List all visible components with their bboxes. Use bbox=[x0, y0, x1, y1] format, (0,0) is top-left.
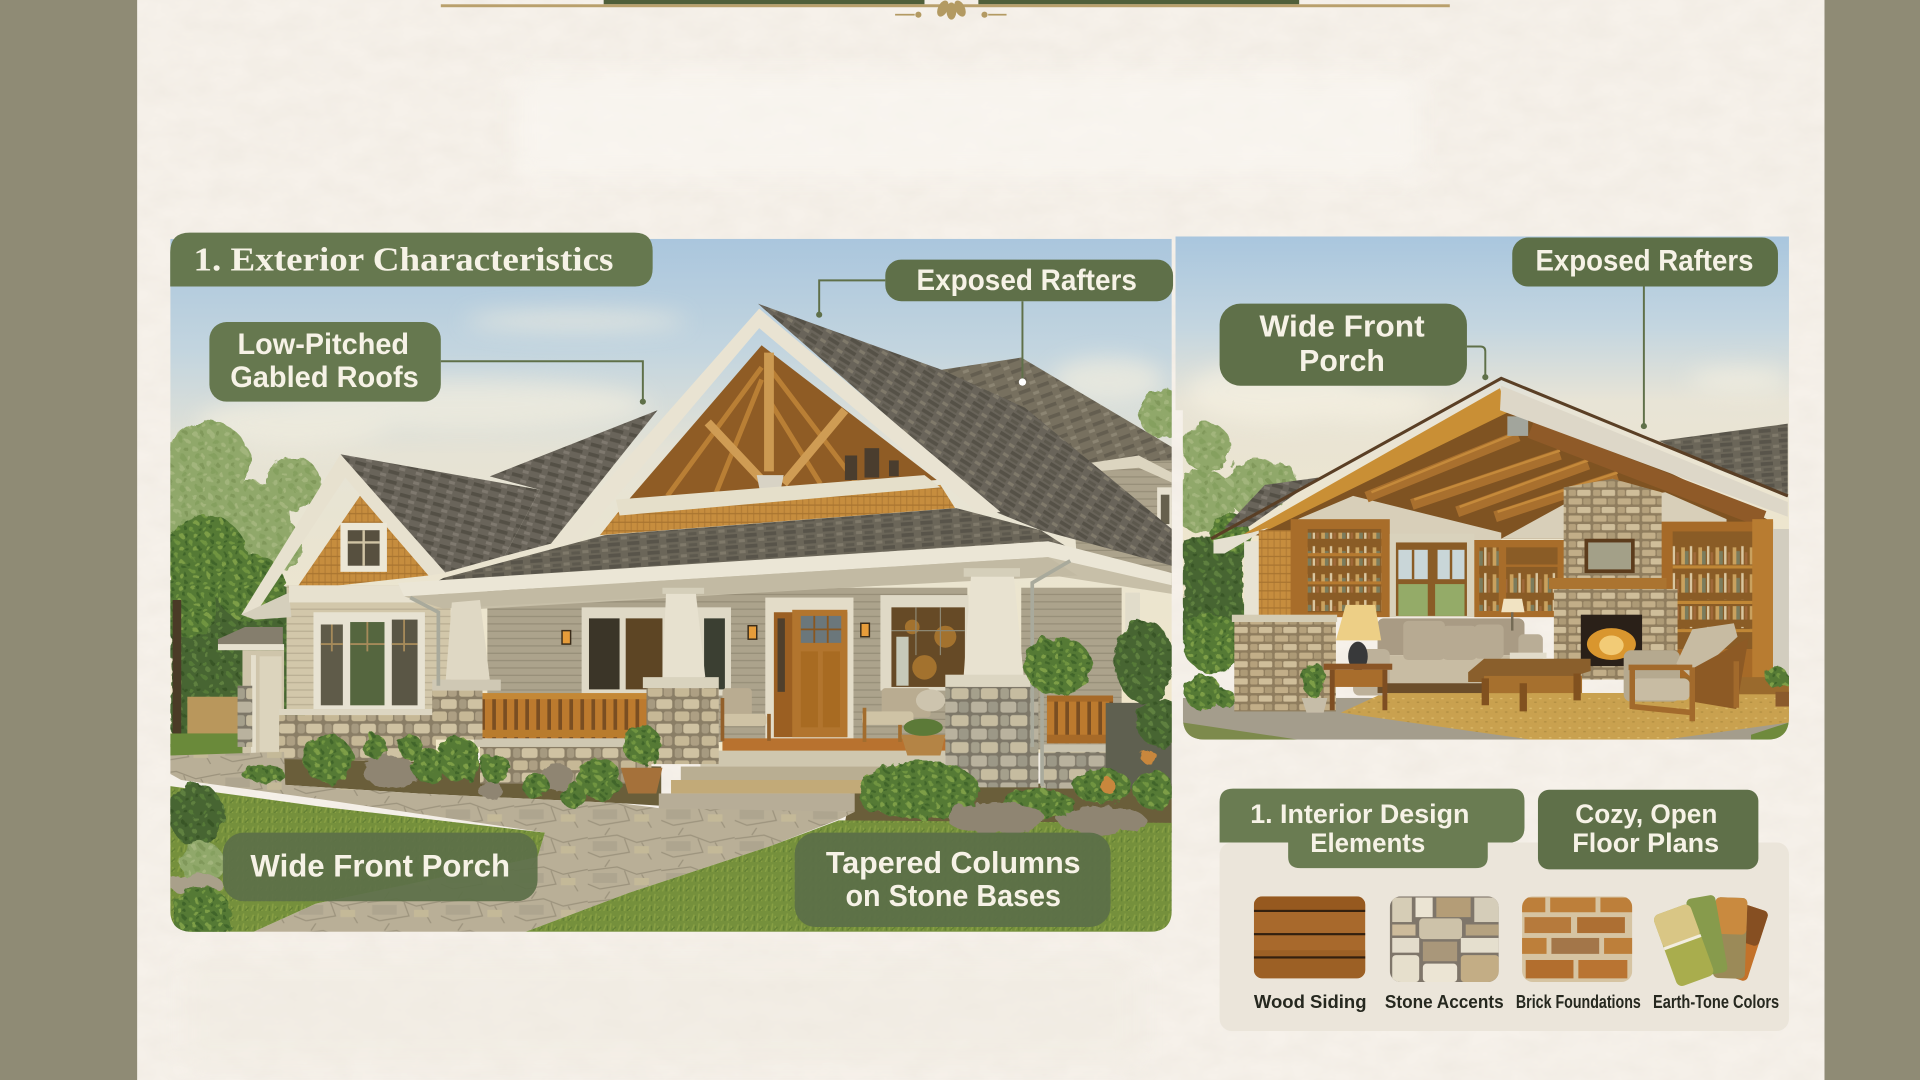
armchair bbox=[1624, 623, 1749, 721]
interior sky bbox=[1176, 236, 1789, 604]
porch roof bbox=[439, 508, 1066, 580]
sofa bbox=[1353, 618, 1543, 696]
small lamp bbox=[1501, 599, 1524, 631]
porch back wall bbox=[487, 588, 967, 742]
middle bookshelf bbox=[1474, 540, 1565, 617]
upper wing wall bbox=[1071, 460, 1172, 588]
window right side bbox=[1126, 593, 1140, 632]
tapered columns bbox=[432, 568, 1038, 787]
ceiling bbox=[1244, 392, 1773, 539]
caption: Brick Foundations: Brick Foundations bbox=[1516, 991, 1641, 1012]
interior window bbox=[1390, 534, 1474, 617]
back roof left bbox=[490, 410, 658, 556]
back roof right bbox=[942, 358, 1172, 472]
low porch foundation bbox=[474, 703, 1172, 789]
roof behind bbox=[1224, 478, 1319, 528]
floor and rug bbox=[1183, 677, 1789, 747]
plant pot bbox=[1302, 662, 1327, 713]
panel: exterior house illustration bbox=[136, 239, 1188, 945]
interior trees bbox=[1172, 422, 1294, 672]
callout: Exposed Rafters interior bbox=[1512, 238, 1778, 429]
callout: Cozy, Open Floor Plans: Cozy, Open bbox=[1575, 799, 1717, 829]
panel: interior cutaway illustration bbox=[1172, 236, 1789, 747]
table lamp and end table bbox=[1324, 605, 1392, 710]
coffee table bbox=[1468, 653, 1591, 711]
planter bbox=[621, 725, 662, 793]
icon: flower ornament bbox=[895, 0, 1007, 20]
shrubs and rocks bbox=[241, 620, 1185, 834]
small gable bbox=[241, 454, 540, 620]
heading: 1. Interior Design Elements: 1. Interior Design bbox=[1250, 799, 1469, 829]
left stone base bbox=[279, 715, 436, 762]
trees left bbox=[170, 420, 322, 747]
callout: Low-Pitched Gabled Roofs: Gabled Roofs bbox=[230, 361, 419, 394]
callout: Cozy, Open Floor Plans bbox=[1538, 790, 1758, 869]
caption: Earth-Tone Colors: Earth-Tone Colors bbox=[1653, 991, 1779, 1012]
heading: 1. Interior Design Elements bbox=[1220, 789, 1524, 868]
right railing bbox=[1047, 696, 1113, 743]
porch floor bbox=[722, 738, 949, 753]
callout: Low-Pitched Gabled Roofs bbox=[209, 322, 646, 405]
garage bbox=[218, 627, 283, 644]
fireplace bbox=[1549, 479, 1678, 680]
background tree right bbox=[1138, 388, 1172, 438]
left triple window bbox=[279, 585, 438, 715]
callout: Wide Front Porch interior: Wide Front bbox=[1259, 310, 1425, 344]
right porch window bbox=[880, 595, 969, 691]
left exterior wall bbox=[1244, 541, 1259, 617]
porch fascia bbox=[398, 541, 1172, 596]
fence bbox=[187, 697, 241, 733]
callout: Wide Front Porch interior: Porch bbox=[1299, 344, 1385, 378]
swatch: brick foundations bbox=[1522, 896, 1632, 982]
stone base left bbox=[1234, 620, 1336, 711]
gable white trim bbox=[645, 308, 1000, 512]
main roof right slope bbox=[758, 304, 1172, 566]
callout: Exposed Rafters exterior: Exposed Rafters bbox=[917, 264, 1137, 297]
sky bbox=[170, 239, 1172, 753]
porch windows bbox=[582, 607, 731, 696]
roof edge and soffit bbox=[1244, 388, 1507, 534]
callout: 1. Exterior Characteristics heading: 1. Exterior Characteristics bbox=[193, 241, 613, 279]
gable wood opening bbox=[624, 345, 937, 504]
left railing bbox=[482, 693, 647, 738]
callout: Wide Front Porch exterior bbox=[223, 833, 538, 901]
lawn and path bbox=[170, 752, 1172, 932]
left shrubs bbox=[1184, 649, 1234, 710]
callout: Low-Pitched Gabled Roofs: Low-Pitched bbox=[238, 328, 409, 361]
downspouts bbox=[410, 561, 1070, 786]
swatch: stone accents bbox=[1390, 896, 1499, 982]
exposed beams bbox=[1367, 430, 1763, 519]
lanterns bbox=[562, 623, 869, 644]
callout: 1. Exterior Characteristics heading bbox=[170, 233, 653, 287]
callout: Tapered Columns on Stone Bases: Tapered Columns bbox=[826, 846, 1081, 880]
front door bbox=[765, 598, 853, 742]
heading: 1. Interior Design Elements: Elements bbox=[1310, 828, 1425, 858]
left bookshelf bbox=[1291, 519, 1390, 617]
callout: Tapered Columns on Stone Bases: on Stone Bases bbox=[846, 879, 1061, 913]
gable cedar shingle wall bbox=[600, 485, 955, 535]
swatch: wood siding bbox=[1254, 896, 1365, 978]
callout: Exposed Rafters interior: Exposed Rafters bbox=[1536, 245, 1753, 278]
basket on porch bbox=[901, 719, 945, 756]
callout: Wide Front Porch exterior: Wide Front Porch bbox=[250, 848, 510, 884]
left lower wall bbox=[287, 585, 451, 715]
callout: Exposed Rafters exterior bbox=[816, 260, 1173, 386]
porch steps bbox=[659, 751, 945, 812]
garden bed bbox=[220, 759, 1172, 833]
porch chairs bbox=[722, 688, 945, 742]
right potted plant bbox=[1766, 666, 1788, 688]
exposed truss bbox=[765, 353, 773, 471]
swatch: earth-tone fan bbox=[1652, 894, 1769, 988]
right bookshelf bbox=[1660, 519, 1789, 684]
callout: Cozy, Open Floor Plans: Floor Plans bbox=[1572, 828, 1719, 858]
callout: Wide Front Porch interior bbox=[1220, 304, 1488, 386]
caption: Stone Accents: Stone Accents bbox=[1385, 991, 1504, 1012]
panel: materials bbox=[1220, 789, 1789, 1031]
foreground plants left bbox=[169, 782, 231, 945]
callout: Tapered Columns on Stone Bases bbox=[795, 833, 1111, 927]
header ornament bbox=[441, 0, 1450, 20]
caption: Wood Siding: Wood Siding bbox=[1254, 991, 1367, 1012]
